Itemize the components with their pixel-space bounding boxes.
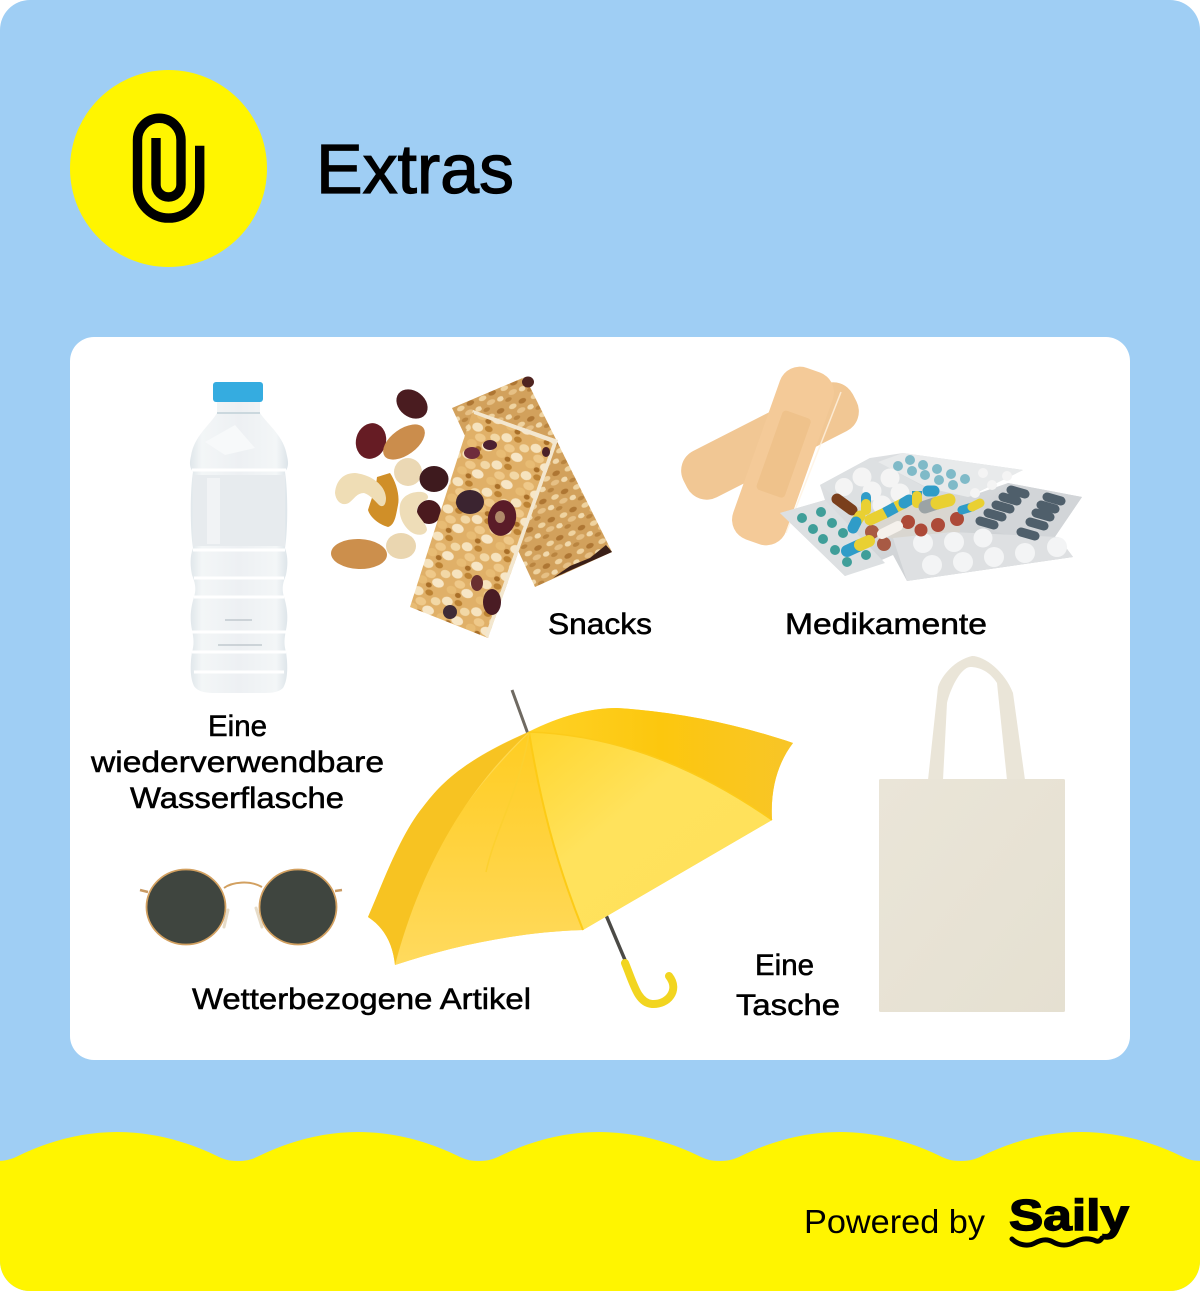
icon: paperclip badge	[70, 70, 267, 267]
label: water bottle	[90, 710, 384, 815]
icon: nuts and dried fruit	[330, 383, 448, 570]
label: water bottle: wiederverwendbare	[90, 746, 384, 779]
footer wave band	[0, 1132, 1200, 1291]
icon: medicine blisters	[780, 453, 1082, 581]
label: weather items: Wetterbezogene Artikel	[192, 983, 531, 1016]
label: water bottle: Wasserflasche	[130, 782, 344, 815]
label: medication: Medikamente	[785, 608, 987, 641]
panel: items	[70, 337, 1130, 1060]
icon: water bottle	[190, 382, 288, 693]
icon: sunglasses	[140, 870, 342, 944]
icon: tote bag	[879, 656, 1065, 1012]
footer: powered by: Powered by	[804, 1203, 986, 1240]
icon: bandages	[674, 361, 866, 551]
label: snacks: Snacks	[548, 608, 652, 641]
logo: Saily: Saily	[1009, 1191, 1130, 1240]
label: bag: Tasche	[736, 989, 840, 1022]
label: water bottle: Eine	[208, 710, 267, 743]
label: bag	[736, 949, 840, 1022]
title: Extras	[316, 130, 514, 208]
label: bag: Eine	[755, 949, 814, 982]
icon: granola bars	[410, 376, 612, 638]
icon: umbrella	[368, 690, 793, 1004]
